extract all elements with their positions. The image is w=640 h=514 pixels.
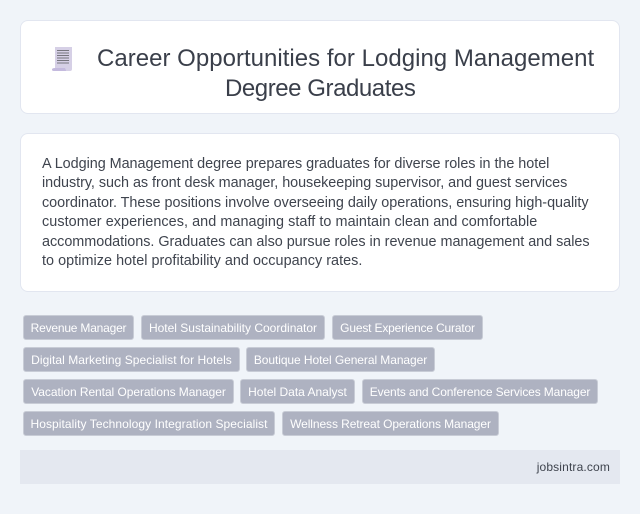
- tag: Events and Conference Services Manager: [370, 385, 590, 399]
- title: [97, 45, 594, 102]
- tag: [23, 411, 275, 436]
- tag: Wellness Retreat Operations Manager: [290, 417, 491, 431]
- tag: Hotel Data Analyst: [248, 385, 347, 399]
- tag: Guest Experience Curator: [340, 321, 475, 335]
- tag: Revenue Manager: [31, 321, 126, 335]
- tags: [23, 315, 598, 436]
- header card: [20, 20, 620, 114]
- tag: [23, 315, 134, 340]
- tag: [246, 347, 435, 372]
- description text: coordinator. These positions involve overseeing daily operations, ensuring high-quality: [42, 194, 589, 210]
- tag: [282, 411, 499, 436]
- footer bar: [20, 450, 620, 484]
- description text: industry, such as front desk manager, housekeeping supervisor, and guest services: [42, 175, 567, 191]
- tag: [23, 347, 240, 372]
- icon: document scroll: [52, 47, 72, 71]
- description card: [20, 133, 620, 292]
- title: Career Opportunities for Lodging Management: [97, 45, 594, 72]
- tag: Vacation Rental Operations Manager: [31, 385, 226, 399]
- tag: Hospitality Technology Integration Specialist: [30, 417, 268, 431]
- description text: [42, 156, 590, 269]
- text: Degree Graduates: [225, 74, 415, 102]
- tag: Digital Marketing Specialist for Hotels: [31, 353, 232, 367]
- description text: A Lodging Management degree prepares graduates for diverse roles in the hotel: [42, 156, 549, 172]
- tag: Hotel Sustainability Coordinator: [149, 321, 317, 335]
- description text: accommodations. Graduates can also pursue roles in revenue management and sales: [42, 234, 590, 250]
- tag: [362, 379, 598, 404]
- tag: Boutique Hotel General Manager: [254, 353, 427, 367]
- footer text: jobsintra.com: [537, 460, 610, 474]
- tag: [23, 379, 234, 404]
- tag: [332, 315, 483, 340]
- tag: [141, 315, 325, 340]
- description text: customer experiences, and managing staff to maintain clean and comfortable: [42, 214, 537, 230]
- tag: [240, 379, 355, 404]
- description text: to optimize hotel profitability and occupancy rates.: [42, 253, 362, 269]
